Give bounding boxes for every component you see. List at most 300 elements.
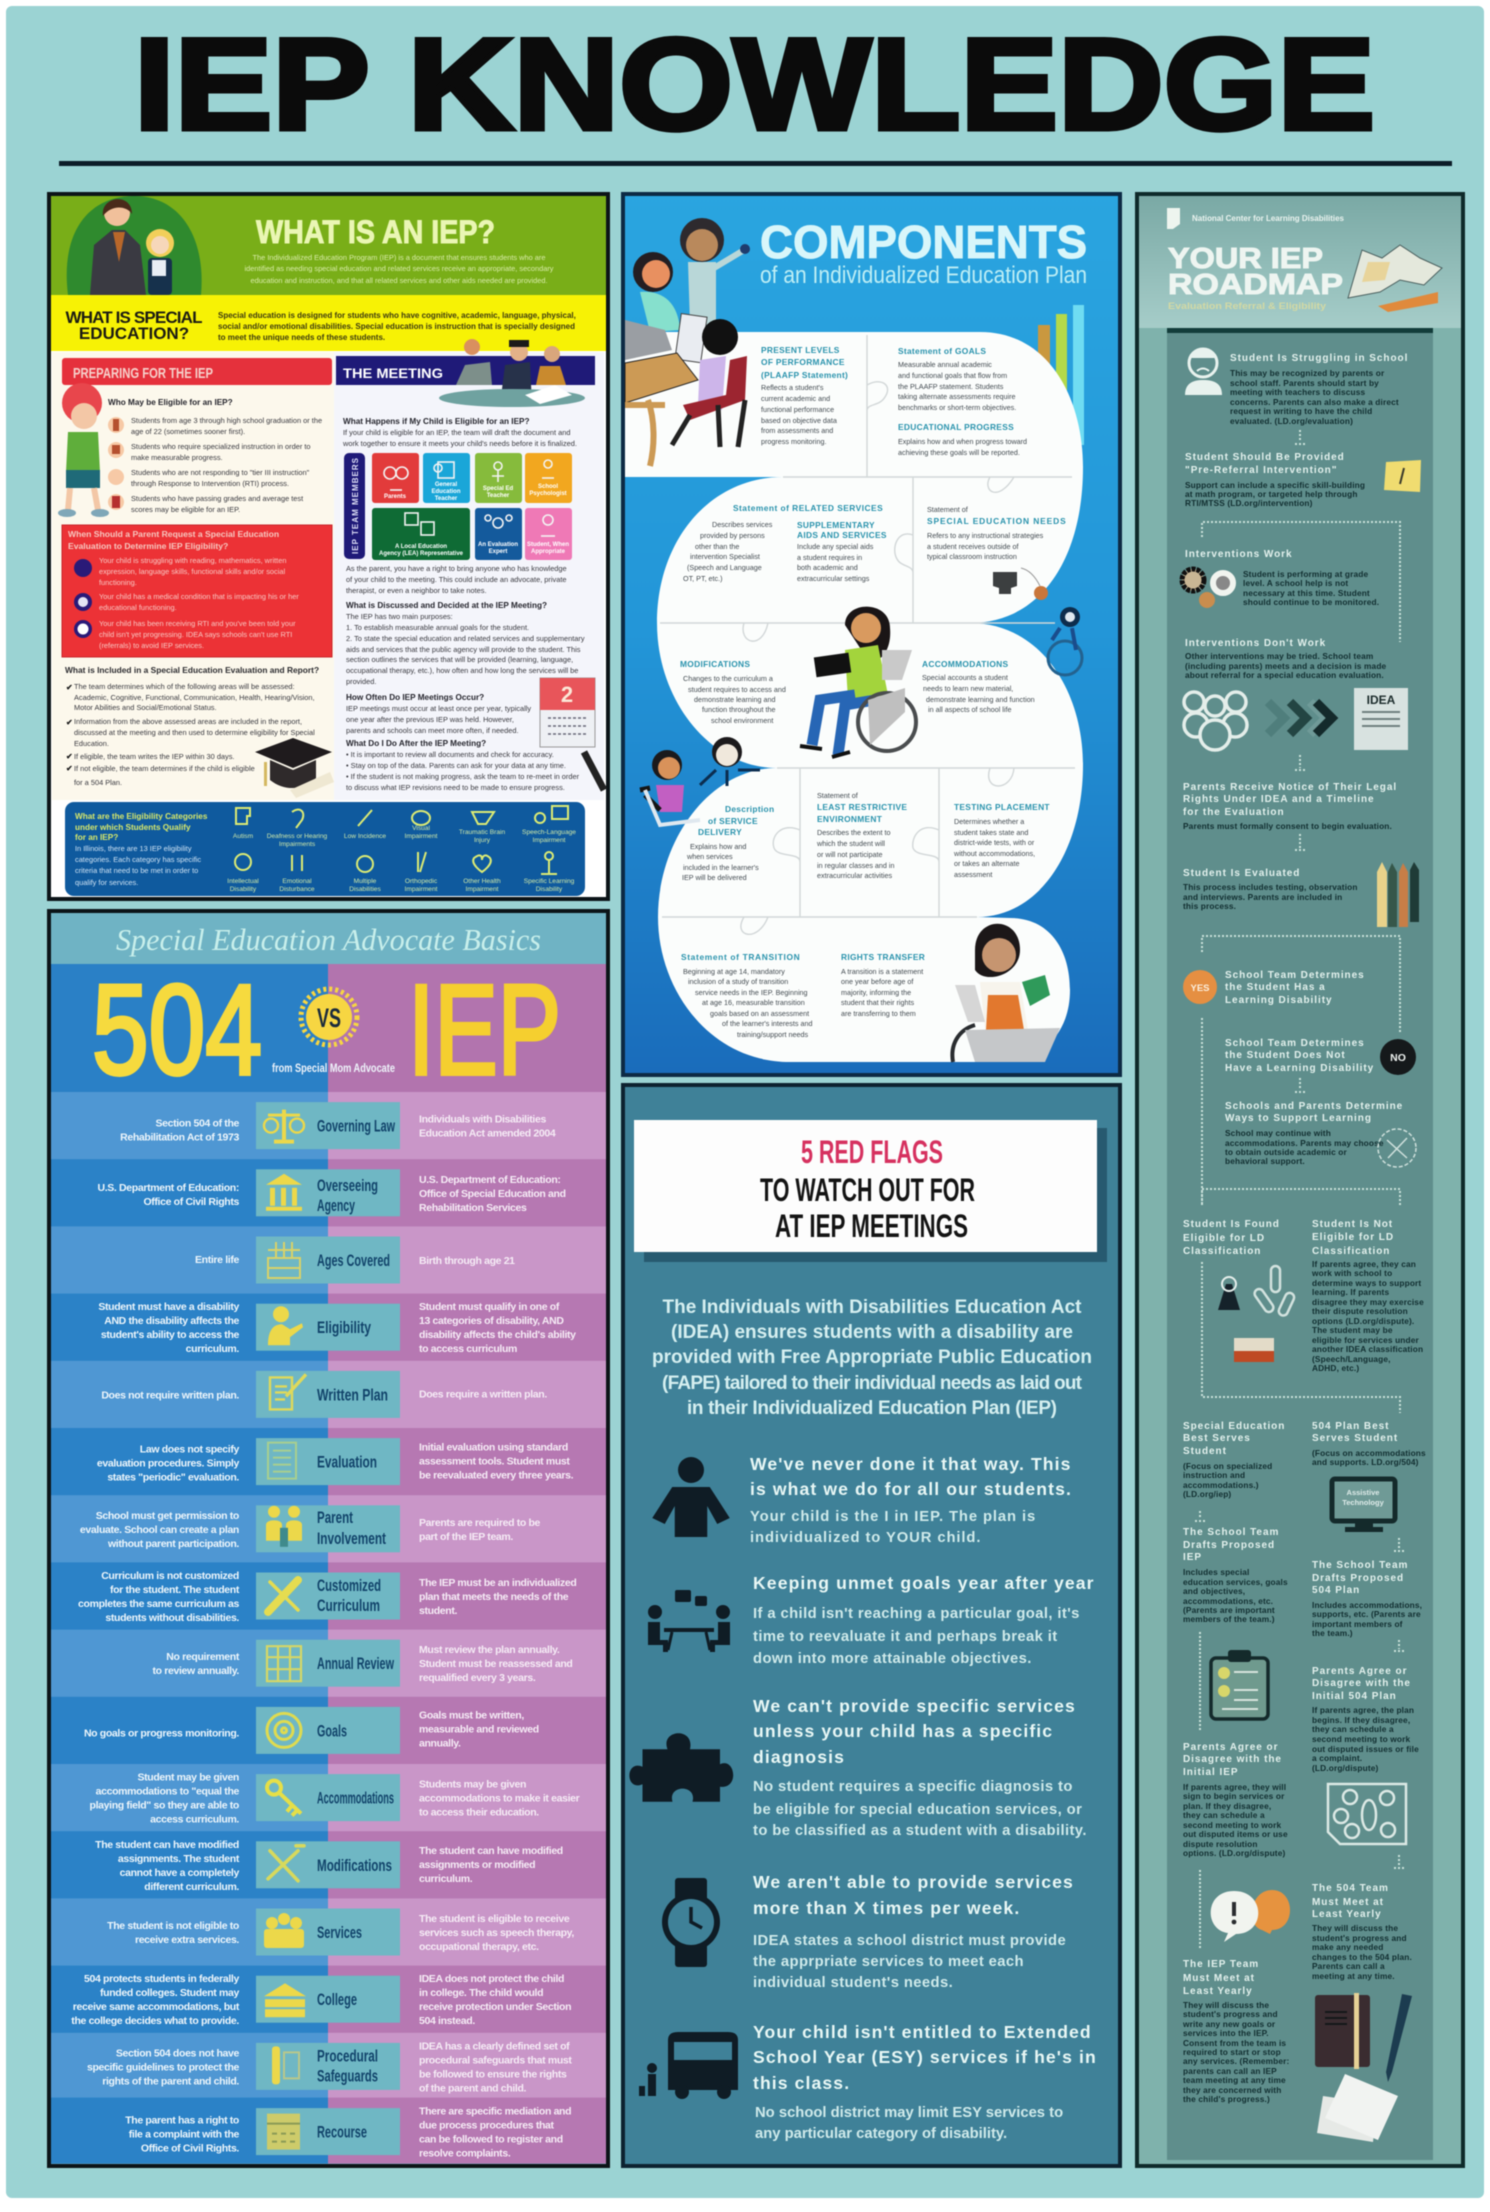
row: written plan: Written Plan [317,1385,388,1404]
row: services: The student is not eligible to [107,1920,239,1932]
icon: IDEA document [1354,688,1408,750]
text: service delivery: of SERVICE [708,816,758,826]
flag 3 text: We can't provide specific services [753,1696,1076,1716]
step: student is evaluated: This process includes testing, observation [1183,882,1358,892]
IEP team members tiles: General [435,482,457,488]
text: special education needs: Refers to any instructional strategies [927,531,1044,540]
blue eligibility categories box: Autism [233,833,254,840]
step: special education best serves: Best Serves [1183,1433,1251,1444]
row: ages covered: Ages Covered [317,1251,390,1270]
meeting details text: one year after the previous IEP was held. However, [346,715,514,724]
step: IEP team meets: the child's progress.) [1183,2094,1270,2104]
text: least restrictive environment: LEAST RESTRICTIVE [817,802,907,812]
blue eligibility categories box: What are the Eligibility Categories [75,812,208,821]
evaluation and report checklist: Education. [74,739,109,748]
text: related services: a student requires in [797,553,862,562]
row: annual review: No requirement [166,1651,240,1663]
row: overseeing agency: Rehabilitation Services [419,1202,527,1214]
step: student is struggling: school staff. Parents should start by [1230,378,1379,388]
icon: group of people [1184,692,1247,750]
heading: your IEP roadmap [1168,243,1343,312]
evaluation and report checklist: ✔ [66,752,73,761]
title card: TO WATCH OUT FOR [760,1172,975,1208]
step: interventions don't work: Interventions Don't Work [1185,638,1326,649]
icon: monitor: Technology [1342,1498,1385,1507]
text: accommodations: needs to learn new material, [923,684,1013,693]
step: team drafts 504: Drafts Proposed [1312,1573,1404,1584]
step: ways to support learning: accommodations. Parents may choose [1225,1138,1384,1148]
inner column [1167,328,1433,2160]
row: written plan: Does not require written plan. [101,1389,239,1401]
step: student is evaluated: this process. [1183,901,1236,911]
meeting column text: If your child is eligible for an IEP, the team will draft the document and [343,428,570,437]
row: recourse: can be followed to register and [419,2134,563,2146]
step: team drafts IEP: Drafts Proposed [1183,1540,1275,1551]
icon: pencils [1377,862,1419,927]
step: student is struggling: concerns. Parents can also make a direct [1230,397,1399,407]
red callout: when to request evaluation: Your child is struggling with reading, mathematics, written [99,556,286,565]
evaluation and report checklist: ✔ [66,683,73,692]
step: not eligible [1311,1219,1424,1373]
step: special education best serves: Special Education [1183,1421,1285,1432]
step: IEP team meets: student's progress and [1183,2009,1278,2019]
title card: AT IEP MEETINGS [775,1208,968,1244]
illustration: meeting people [439,339,585,407]
arrow [1394,1640,1404,1651]
flag 5 text [753,2022,1097,2142]
row: accommodations [51,1764,606,1832]
blue eligibility categories box: categories. Each category has specific [75,855,201,864]
meeting column text: What Happens if My Child is Eligible for an IEP? [343,417,530,426]
heading: what is an IEP: WHAT IS AN IEP? [256,214,495,250]
logo: National Center for Learning Disabilities [1192,213,1344,223]
row: college: IDEA does not protect the child [419,1973,564,1985]
blue eligibility categories box: Traumatic Brain [459,829,505,836]
row: ages covered: Entire life [195,1254,240,1266]
step: ways to support learning: to obtain outside academic or [1225,1147,1348,1157]
text: related services: both academic and [797,563,858,572]
text: statement of goals: Statement of GOALS [898,346,986,356]
step: 504 team meets [1312,1883,1412,1981]
text: related services: provided by persons [700,531,765,540]
row: governing law: Section 504 of the [155,1118,240,1130]
row: procedural safeguards: IDEA has a clearly defined set of [419,2040,570,2052]
row: procedural safeguards: Procedural [317,2046,378,2065]
step: interventions work: should continue to be monitored. [1243,597,1379,607]
intro text: identified as needing special education and related services receive an appropriate, secondary [245,264,554,273]
IEP team members tiles: Teacher [487,493,510,499]
title: IEP KNOWLEDGE [134,11,1375,157]
flag 3 text: unless your child has a specific [753,1721,1053,1741]
icon: papers [1317,2074,1398,2142]
blue eligibility categories box: Multiple [354,878,377,885]
banner: the meeting [336,356,595,385]
row: services: receive extra services. [135,1934,239,1946]
step: interventions don't work: about referral for a special education evaluation. [1185,670,1384,680]
arrow [1295,1078,1305,1092]
step: interventions don't work: (including parents) meets and a decision is made [1185,661,1387,671]
row: overseeing agency [51,1159,606,1227]
row: parent involvement: without parent participation. [107,1538,239,1550]
step: IEP team meets: they are concerned with [1183,2085,1281,2095]
step: has a learning disability: School Team Determines [1225,970,1365,981]
red callout: when to request evaluation: functioning. [99,578,137,587]
row: parent involvement: evaluate. School can create a plan [80,1524,239,1536]
step: ways to support learning: behavioral support. [1225,1156,1305,1166]
text: accommodations: demonstrate learning and function [926,695,1035,704]
row: ages covered [51,1226,606,1294]
row: evaluation: Initial evaluation using standard [419,1442,568,1454]
IEP team members tiles: Special Ed [483,486,514,492]
row: annual review: requalified every 3 years. [419,1672,536,1684]
text: modifications: school environment [711,716,773,725]
step: 504 plan best serves: 504 Plan Best [1312,1421,1389,1432]
text: testing placement: assessment [954,870,992,879]
step: 504 plan best serves [1312,1421,1426,1467]
step: parents agree IEP: Disagree with the [1183,1754,1282,1765]
text: special education needs: Statement of [927,505,968,514]
step: interventions work: Interventions Work [1185,549,1292,560]
step: not eligible: determine ways to support [1312,1278,1421,1288]
intro paragraph: in their Individualized Education Plan (IEP) [687,1398,1057,1419]
meeting details text: parents and schools can meet more often, if needed. [346,726,519,735]
step: student is struggling [1230,353,1408,426]
row: evaluation: states "periodic" evaluation. [107,1472,239,1484]
logo [1167,208,1344,229]
row: customized curriculum: student. [419,1605,457,1617]
step: IEP team meets: The IEP Team [1183,1959,1259,1970]
row: procedural safeguards: procedural safeguards that must [419,2054,572,2066]
IEP team members tiles: Student, When [527,542,569,548]
meeting column text: work together to ensure it meets your child's needs before it is finalized. [342,439,577,448]
icon: monitor: Assistive [1347,1488,1379,1497]
row: modifications: Modifications [317,1856,392,1875]
step: ways to support learning [1225,1101,1403,1166]
icon: projector and small figure [993,568,1082,675]
blue eligibility categories box: Disability [536,886,563,893]
evaluation and report checklist: discussed at the meeting and then used to determine eligibility for Special [74,728,315,737]
row: annual review: Student must be reassessed and [419,1658,572,1670]
row: parent involvement: Involvement [317,1529,386,1548]
step: parents receive notice [1183,782,1397,831]
step: pre-referral: "Pre-Referral Intervention" [1185,465,1337,476]
step: 504 team meets: Least Yearly [1312,1909,1382,1920]
step: 504 plan best serves: and supports. LD.org/504) [1312,1457,1419,1467]
504 vs IEP banner: 504 [92,959,262,1102]
text: transition: of the learner's interests and [722,1019,812,1028]
flag 3 text [753,1696,1087,1839]
flag 2 text: If a child isn't reaching a particular goal, it's [753,1606,1080,1622]
row: annual review [51,1630,606,1697]
row: overseeing agency: Office of Special Education and [419,1188,566,1200]
blue eligibility categories box: Impairment [405,886,438,893]
step: 504 team meets: changes to the 504 plan. [1312,1952,1412,1962]
evaluation and report checklist: Academic, Cognitive, Functional, Communication, Health, Hearing/Vision, [74,693,315,702]
text: rights transfer: are transferring to them [841,1009,916,1018]
text: related services: SUPPLEMENTARY [797,520,875,530]
row: evaluation: Law does not specify [140,1444,239,1456]
step: 504 team meets: They will discuss the [1312,1923,1398,1933]
meeting details text: 2. To state the special education and related services and supplementary [346,634,585,643]
row: customized curriculum: students without disabilities. [105,1612,239,1624]
blue eligibility categories box: Impairment [466,886,499,893]
icon: IDEA document: IDEA [1367,693,1396,707]
row: college: 504 protects students in federally [84,1973,239,1985]
step: not eligible: their dispute resolution [1312,1306,1408,1316]
text: related services [683,503,887,583]
icon: clipboard [1211,1650,1268,1719]
text: present levels: progress monitoring. [761,437,827,446]
text: testing placement: or takes an alternate [954,859,1020,868]
panel: your IEP roadmap [1137,194,1463,2166]
step: 504 team meets: student's progress and [1312,1933,1407,1943]
icon: monitor [1332,1479,1395,1532]
header gradient [1139,196,1461,328]
text: least restrictive environment: in regular classes and in [817,861,895,870]
icon: speech bubbles [1211,1890,1290,1942]
intro paragraph: (FAPE) tailored to their individual needs as laid out [662,1373,1083,1394]
text: present levels: current academic and [761,394,830,403]
row: overseeing agency: Overseeing [317,1176,378,1195]
intro text: The Individualized Education Program (IEP) is a document that ensures students who are [253,253,545,262]
flag 4 text: the apprpriate services to meet each [753,1954,1024,1970]
step: student is evaluated: Student Is Evaluated [1183,868,1300,879]
meeting details text: • If the student is not making progress, ask the team to re-meet in order [346,772,580,781]
step: 504 team meets: make any needed [1312,1942,1383,1952]
who may be eligible list [108,398,322,514]
row: procedural safeguards [51,2033,606,2100]
row: accommodations: playing field" so they are able to [90,1800,239,1812]
text: rights transfer [841,952,925,1018]
illustration: woman with apron [952,924,1060,1062]
step: parents agree IEP: they can schedule a [1183,1810,1265,1820]
row: modifications: cannot have a completely [120,1867,239,1879]
text: present levels: OF PERFORMANCE [761,357,845,367]
step: parents agree 504: Disagree with the [1312,1678,1411,1689]
who may be eligible list: make measurable progress. [131,453,223,462]
step: 504 team meets: Must Meet at [1312,1897,1384,1908]
step: IEP team meets [1182,1959,1289,2104]
step: IEP team meets: Must Meet at [1183,1973,1255,1984]
illustration: teacher and child [67,196,202,295]
step: parents agree 504 [1312,1666,1419,1773]
row: customized curriculum: Customized [317,1576,381,1595]
step: not eligible: learning. If parents [1312,1287,1389,1297]
row: modifications: different curriculum. [144,1881,239,1893]
bar chart decoration [1024,305,1084,445]
step: IEP team meets: Least Yearly [1183,1986,1253,1997]
meeting details text: provided. [346,677,376,686]
arrow [1195,1511,1205,1521]
step: not eligible: The student may be [1312,1325,1393,1335]
meeting details text: What is Discussed and Decided at the IEP Meeting? [346,601,547,610]
step: IEP team meets: Consent from the team is [1183,2038,1286,2048]
text: modifications: demonstrate learning and [694,695,776,704]
row: goals: annually. [419,1737,461,1749]
text: least restrictive environment [816,791,907,880]
evaluation and report checklist: The team determines which of the following areas will be assessed: [74,682,295,691]
row: accommodations: accommodations to "equal the [96,1786,240,1798]
banner: preparing for the IEP: PREPARING FOR THE IEP [73,365,213,382]
row: procedural safeguards: specific guidelines to protect the [87,2061,240,2073]
text: accommodations: in all aspects of school life [928,705,1012,714]
row: modifications: The student can have modified [95,1839,239,1851]
step: pre-referral: Student Should Be Provided [1185,452,1345,463]
text: service delivery: Description [725,804,774,814]
row: evaluation [51,1428,606,1496]
red callout: when to request evaluation: expression, language skills, functional skills and/or social [99,567,285,576]
step: student is struggling: meeting with teachers to discuss [1230,387,1366,397]
blue eligibility categories box: In Illinois, there are 13 IEP eligibility [75,844,192,853]
row: eligibility: disability affects the child's ability [419,1329,576,1341]
step: team drafts 504 [1312,1560,1422,1638]
row: accommodations: Student may be given [137,1772,239,1784]
step: team drafts 504: supports, etc. (Parents are [1312,1609,1421,1619]
evaluation and report checklist: for a 504 Plan. [74,778,122,787]
step: not eligible: Classification [1312,1246,1390,1257]
row: modifications [51,1831,606,1899]
IEP team members tiles: Education [431,489,461,495]
step: team drafts IEP: members of the team.) [1183,1614,1275,1624]
flag 4 text: We aren't able to provide services [753,1872,1074,1892]
text: present levels: based on objective data [761,416,837,425]
flag 2 text: time to reevaluate it and perhaps break it [753,1629,1058,1645]
flag 2 text [753,1573,1095,1667]
row: college: College [317,1990,357,2009]
evaluation and report checklist: Motor Abilities and Social/Emotional Status. [74,703,217,712]
step: team drafts IEP: education services, goals [1183,1577,1288,1587]
text: statement of goals: Explains how and when progress toward [898,437,1027,446]
icon: notebook [1315,1993,1370,2069]
red callout: when to request evaluation: (referrals) to avoid IEP services. [99,641,204,650]
step: team drafts IEP: accommodations, etc. [1183,1596,1273,1606]
flag 5 text: School Year (ESY) services if he's in [753,2047,1097,2067]
red callout: when to request evaluation: Your child has been receiving RTI and you've been told your [99,619,296,628]
text: rights transfer: one year before age of [841,977,913,986]
text: accommodations: Special accounts a student [922,673,1008,682]
step: 504 team meets: meeting at any time. [1312,1971,1395,1981]
blue eligibility categories box: Other Health [463,878,501,885]
blue eligibility categories box: Visual [412,825,430,832]
step: IEP team meets: write any new goals or [1182,2019,1276,2029]
right pale column [334,352,604,800]
text: statement of goals: EDUCATIONAL PROGRESS [898,422,1014,432]
meeting details text: The IEP has two main purposes: [346,612,453,621]
meeting details text [346,564,585,792]
meeting details text: 1. To establish measurable annual goals for the student. [346,623,529,632]
row: college: in college. The child would [419,1987,543,1999]
text: least restrictive environment: or will not participate [817,850,883,859]
row: procedural safeguards: of the parent and child. [419,2082,527,2094]
icon: sticky note [1384,460,1421,492]
row: eligibility: Eligibility [317,1318,371,1337]
row: customized curriculum: for the student. The student [110,1584,240,1596]
step: parents agree 504: a complaint. [1312,1753,1362,1763]
row: procedural safeguards: rights of the parent and child. [102,2075,239,2087]
step: parents agree IEP: If parents agree, they will [1183,1782,1286,1792]
arrow [1394,1538,1404,1551]
row: eligibility: 13 categories of disability, AND [419,1315,564,1327]
step: found eligible: Classification [1183,1246,1261,1257]
left connector [1199,1632,1201,1732]
blue eligibility categories box: Intellectual [227,878,259,885]
evaluation and report checklist: ✔ [66,718,73,727]
who may be eligible list: scores may be eligible for an IEP. [131,505,240,514]
left connector to split [1202,1262,1400,1413]
text: related services: other than the [695,542,739,551]
step: not eligible: eligible for services under [1312,1335,1419,1345]
text: least restrictive environment: ENVIRONMENT [817,814,883,824]
text: statement of goals: achieving these goals will be reported. [898,448,1020,457]
504 vs IEP banner: VS [317,1003,341,1033]
step: parents agree 504: second meeting to work [1312,1734,1411,1744]
step: IEP team meets: any services. (Remember: [1183,2056,1289,2066]
flag 5 text: No school district may limit ESY services to [755,2105,1063,2121]
flag 5 text: Your child isn't entitled to Extended [753,2022,1092,2042]
text: rights transfer: A transition is a statement [841,967,923,976]
row: written plan: Does require a written plan. [419,1388,547,1400]
chevrons [1268,702,1332,734]
text: modifications: MODIFICATIONS [680,659,750,669]
left cream column [52,352,334,800]
row: ages covered: Birth through age 21 [419,1255,515,1267]
row: eligibility: student's ability to access the [101,1329,240,1341]
text: service delivery: DELIVERY [698,827,742,837]
text: testing placement: student takes state and [954,828,1028,837]
step: parents agree 504: Initial 504 Plan [1312,1691,1397,1702]
text: related services: (Speech and Language [687,563,762,572]
heading: components: COMPONENTS [760,216,1087,268]
meeting details text: of your child to the meeting. This could include an advocate, private [346,575,566,584]
row: evaluation: assessment tools. Student must [419,1456,570,1468]
step: special education best serves: Student [1183,1446,1227,1457]
step: student is struggling: This may be recognized by parents or [1230,368,1385,378]
blue eligibility categories box: Impairment [405,833,438,840]
step: IEP team meets: They will discuss the [1183,2000,1269,2010]
step: parents receive notice: for the Evaluation [1183,807,1285,818]
row: college [51,1966,606,2033]
row: goals: Goals must be written, [419,1709,524,1721]
row: eligibility: Student must qualify in one of [419,1301,560,1313]
step: parents agree 504: out disputed issues or file [1312,1744,1419,1754]
intro paragraph: The Individuals with Disabilities Education Act [662,1297,1082,1318]
row: evaluation: Evaluation [317,1453,377,1472]
text: related services: OT, PT, etc.) [683,574,723,583]
flag 4 text: more than X times per week. [753,1898,1020,1918]
text: testing placement: district-wide tests, with or [954,838,1035,847]
row: procedural safeguards: be followed to ensure the rights [419,2068,567,2080]
IEP team members tiles: A Local Education [395,544,447,550]
row: eligibility [51,1294,606,1361]
step: 504 plan best serves: Serves Student [1312,1433,1398,1444]
step: team drafts IEP: (Parents are important [1183,1605,1275,1615]
row: customized curriculum: The IEP must be an individualized [419,1577,576,1589]
text: accommodations: ACCOMMODATIONS [922,659,1009,669]
text: statement of goals: the PLAAFP statement. Students [898,382,1004,391]
who may be eligible list: Students who require specialized instruction in order to [131,442,311,451]
left connector [1199,1870,1201,1950]
step: student is struggling: evaluated. (LD.org/evaluation) [1230,416,1353,426]
text: service delivery: IEP will be delivered [682,873,747,882]
row: parent involvement: School must get permission to [96,1510,239,1522]
step: IEP team meets: required to start or stop [1183,2047,1281,2057]
step: not eligible: another IDEA classification [1312,1344,1423,1354]
icon: person [652,1457,730,1537]
illustration: team at table [625,218,750,466]
text: related services: Statement of RELATED SERVICES [733,503,883,513]
step: not eligible: options (LD.org/dispute). [1312,1316,1414,1326]
heading: what is special education: WHAT IS SPECIAL [66,308,202,327]
